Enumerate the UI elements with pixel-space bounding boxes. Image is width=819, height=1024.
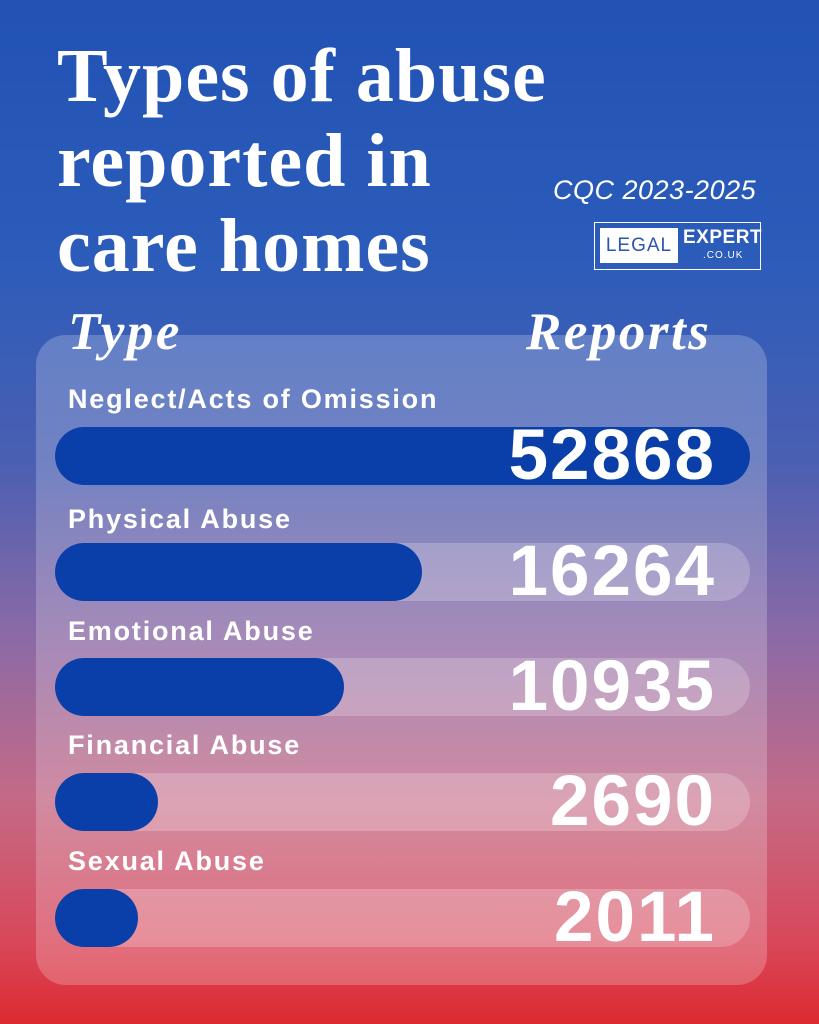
logo: EXPERT <box>683 227 762 248</box>
logo <box>594 222 761 270</box>
bar 1 <box>55 427 750 485</box>
label 2: Physical Abuse <box>68 504 292 534</box>
logo: .CO.UK <box>703 250 743 261</box>
label 5: Sexual Abuse <box>68 846 266 876</box>
bar 3: 10935 <box>509 647 716 726</box>
bar 4 <box>55 773 750 831</box>
bar 4: 2690 <box>550 762 716 841</box>
header: type: Type <box>68 303 182 361</box>
bar 2: 16264 <box>509 532 716 611</box>
title: Types of abuse <box>57 34 547 118</box>
label 4: Financial Abuse <box>68 730 301 760</box>
bar 3 <box>55 658 750 716</box>
title <box>57 34 547 288</box>
label 1: Neglect/Acts of Omission <box>68 384 438 414</box>
title: care homes <box>57 204 431 288</box>
header: reports: Reports <box>526 303 711 361</box>
title: reported in <box>57 119 432 203</box>
bar 1: 52868 <box>509 416 716 495</box>
bar 2 <box>55 543 750 601</box>
bar 5 <box>55 889 750 947</box>
source text: CQC 2023-2025 <box>553 175 756 205</box>
bar 5: 2011 <box>554 878 716 957</box>
logo: LEGAL <box>606 235 672 256</box>
panel: chart <box>36 335 767 985</box>
label 3: Emotional Abuse <box>68 616 315 646</box>
